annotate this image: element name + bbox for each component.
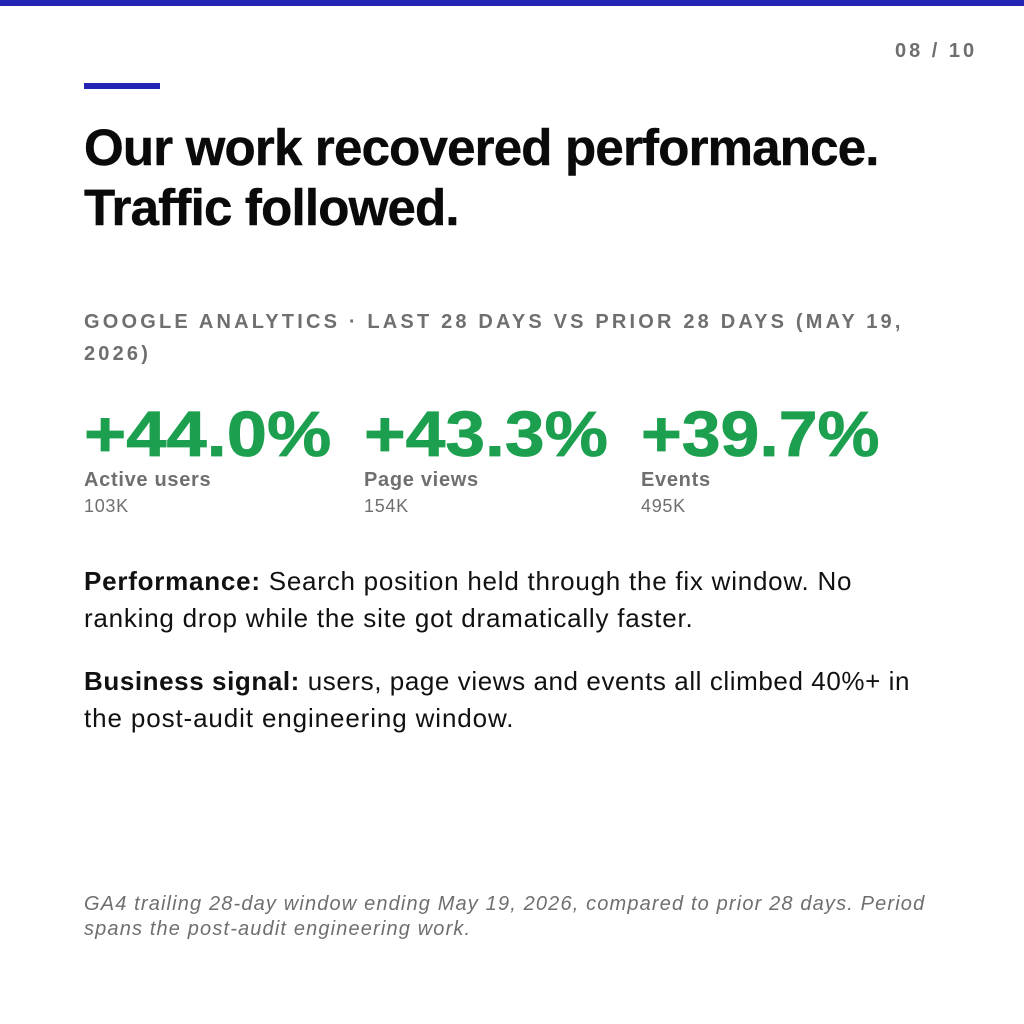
label: Page views bbox=[364, 469, 479, 491]
accent rule bbox=[84, 83, 160, 89]
footnote: GA4 trailing 28-day window ending May 19, 2026, compared to prior 28 days. Period bbox=[84, 893, 925, 915]
metric: page views bbox=[364, 398, 608, 516]
title bbox=[84, 119, 879, 236]
count: 103K bbox=[84, 496, 129, 516]
label: Events bbox=[641, 469, 711, 491]
performance paragraph bbox=[84, 566, 852, 633]
count: 154K bbox=[364, 496, 409, 516]
value: +39.7% bbox=[641, 398, 880, 470]
subtitle bbox=[84, 311, 904, 365]
page number: 08 / 10 bbox=[895, 40, 977, 62]
business signal paragraph bbox=[84, 666, 910, 733]
value: +44.0% bbox=[84, 398, 331, 470]
subtitle: 2026) bbox=[84, 343, 151, 365]
performance paragraph: ranking drop while the site got dramatically faster. bbox=[84, 603, 693, 633]
label: Active users bbox=[84, 469, 211, 491]
performance paragraph: Performance: Search position held through the fix window. No bbox=[84, 566, 852, 596]
count: 495K bbox=[641, 496, 686, 516]
title: Our work recovered performance. bbox=[84, 119, 879, 176]
business signal paragraph: Business signal: users, page views and events all climbed 40%+ in bbox=[84, 666, 910, 696]
footnote bbox=[84, 893, 925, 940]
metric: events bbox=[641, 398, 880, 516]
top bar bbox=[0, 0, 1024, 6]
title: Traffic followed. bbox=[84, 179, 459, 236]
metric: active users bbox=[84, 398, 331, 516]
footnote: spans the post-audit engineering work. bbox=[84, 918, 471, 940]
business signal paragraph: the post-audit engineering window. bbox=[84, 703, 514, 733]
value: +43.3% bbox=[364, 398, 608, 470]
subtitle: GOOGLE ANALYTICS · LAST 28 DAYS VS PRIOR 28 DAYS (MAY 19, bbox=[84, 311, 904, 333]
